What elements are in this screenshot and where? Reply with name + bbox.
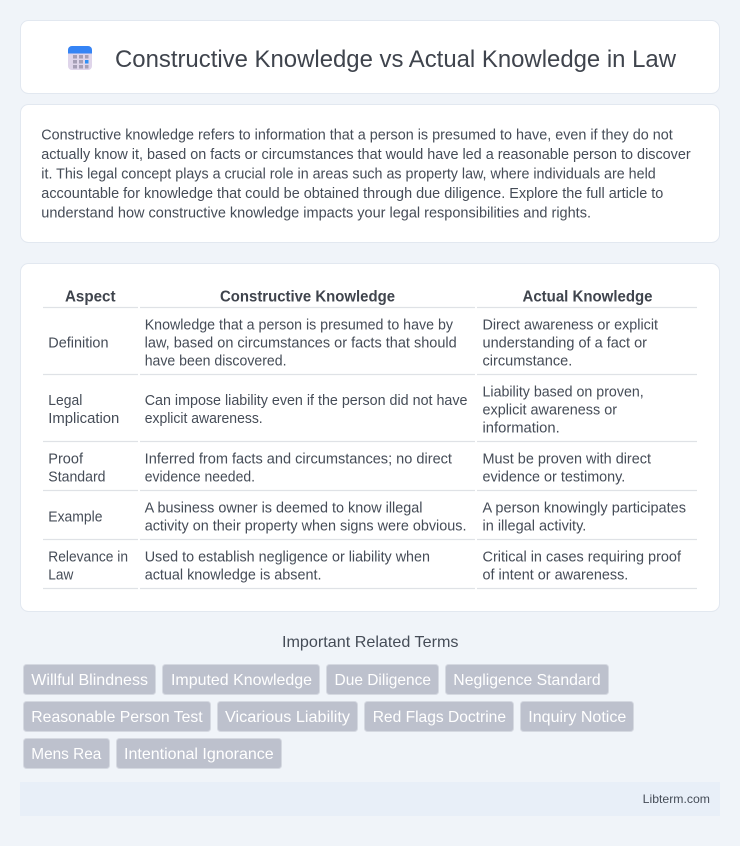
text block: introduction paragraph: Constructive knowledge refers to information that a person is presumed to have, even if they do not — [41, 127, 673, 143]
table row: definition: circumstance. — [482, 353, 572, 369]
title: Constructive Knowledge vs Actual Knowledge in Law — [115, 46, 677, 73]
table row: definition: Definition — [48, 335, 108, 351]
table row: definition — [48, 317, 658, 369]
chip: mens rea: Mens Rea — [31, 746, 101, 763]
table row: definition: Knowledge that a person is presumed to have by — [145, 317, 454, 333]
chip: intentional ignorance: Intentional Ignorance — [124, 746, 274, 763]
table row: definition: Direct awareness or explicit — [482, 317, 658, 333]
table row: example: A person knowingly participates — [482, 500, 686, 516]
chip: imputed knowledge — [162, 664, 320, 694]
chip: reasonable person test: Reasonable Person Test — [31, 709, 203, 726]
table row: proof standard: Proof — [48, 451, 84, 467]
table row: example: in illegal activity. — [482, 518, 586, 534]
table row: definition: law, based on circumstances or facts that should — [145, 335, 457, 351]
table header row: Constructive Knowledge — [220, 289, 395, 306]
table row: definition: understanding of a fact or — [482, 335, 647, 351]
table header row: Aspect — [65, 289, 116, 306]
text block: introduction paragraph: it. This legal concept plays a crucial role in areas such as property law, where individuals are held — [41, 166, 656, 182]
table row: relevance in law: Law — [48, 567, 74, 583]
chip: negligence standard: Negligence Standard — [453, 672, 601, 689]
related term chips — [24, 664, 634, 768]
table row: legal implication: explicit awareness or — [482, 403, 617, 419]
chip: inquiry notice: Inquiry Notice — [528, 709, 626, 726]
table row: legal implication: Can impose liability even if the person did not have — [145, 393, 467, 409]
panel: header — [20, 20, 720, 94]
panel: introduction — [20, 104, 720, 242]
table row: relevance in law: Critical in cases requiring proof — [482, 549, 682, 565]
heading: related terms: Important Related Terms — [282, 634, 458, 651]
table row: legal implication — [48, 385, 644, 437]
chip: vicarious liability: Vicarious Liability — [225, 709, 350, 726]
chip: imputed knowledge: Imputed Knowledge — [171, 672, 312, 689]
footer credit: Libterm.com — [643, 792, 710, 806]
chip: intentional ignorance — [116, 738, 282, 768]
chip: mens rea — [24, 738, 110, 768]
table row: proof standard: evidence or testimony. — [482, 469, 625, 485]
chip: negligence standard — [446, 664, 608, 694]
icon: calendar — [68, 46, 92, 70]
table row: proof standard: evidence needed. — [145, 469, 255, 485]
table row: relevance in law — [48, 549, 682, 583]
table row: legal implication: explicit awareness. — [145, 411, 263, 427]
chip: willful blindness — [24, 664, 156, 694]
text block: introduction paragraph: understand how constructive knowledge impacts your legal responsibilities and rights. — [41, 205, 591, 221]
table row: relevance in law: Relevance in — [48, 549, 128, 565]
table row: legal implication: information. — [482, 421, 560, 437]
text block: introduction paragraph: accountable for knowledge that could be obtained through due diligence. Explore the full article to — [41, 186, 663, 202]
footer — [20, 782, 720, 816]
chip: due diligence: Due Diligence — [334, 672, 431, 689]
table row: example: Example — [48, 509, 102, 525]
table row: relevance in law: Used to establish negligence or liability when — [145, 549, 430, 565]
chip: reasonable person test — [24, 702, 210, 732]
table row: example: A business owner is deemed to know illegal — [145, 500, 422, 516]
table row: proof standard — [48, 451, 651, 485]
panel: comparison table — [20, 264, 720, 612]
table row: example — [48, 500, 686, 534]
chip: red flags doctrine: Red Flags Doctrine — [373, 709, 506, 726]
table row: definition: have been discovered. — [145, 353, 286, 369]
chip: willful blindness: Willful Blindness — [31, 672, 148, 689]
chip: red flags doctrine — [364, 702, 514, 732]
table row: relevance in law: of intent or awareness. — [482, 567, 628, 583]
table row: proof standard: Standard — [48, 469, 106, 485]
text block: introduction paragraph — [41, 127, 691, 221]
table header row: Actual Knowledge — [522, 289, 653, 306]
table row: proof standard: Inferred from facts and circumstances; no direct — [145, 451, 452, 467]
table row: proof standard: Must be proven with direct — [482, 451, 651, 467]
text block: introduction paragraph: actually know it, based on facts or circumstances that would have led a reasonable person to discover — [41, 147, 691, 163]
table row: example: activity on their property when signs were obvious. — [145, 518, 466, 534]
table row: relevance in law: actual knowledge is absent. — [145, 567, 322, 583]
table row: legal implication: Legal — [48, 393, 82, 409]
table row: legal implication: Liability based on proven, — [482, 385, 644, 401]
table row: legal implication: Implication — [48, 411, 119, 427]
chip: vicarious liability — [218, 702, 358, 732]
table header row — [65, 289, 653, 306]
chip: inquiry notice — [520, 702, 634, 732]
chip: due diligence — [326, 664, 438, 694]
